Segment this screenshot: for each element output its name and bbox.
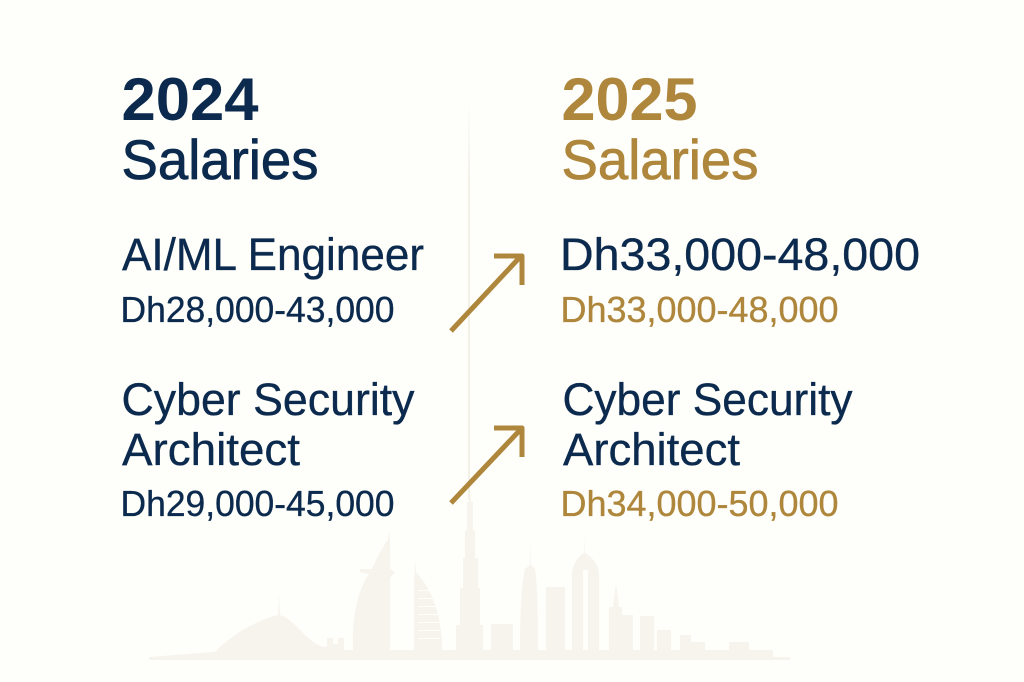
heading: Salaries: Salaries	[562, 128, 758, 191]
role: Cyber Security Architect	[122, 374, 415, 475]
salary: AI/ML Engineer 2024: Dh28,000-43,000	[120, 289, 394, 330]
role: Cyber Security Architect: Architect	[563, 424, 740, 475]
skyline silhouette	[149, 490, 790, 660]
salary headline: Dh33,000-48,000: Dh33,000-48,000	[560, 229, 920, 280]
heading: Salaries: Salaries	[122, 128, 318, 191]
heading: 2024: 2024	[122, 66, 259, 133]
salary: Cyber Security Architect 2024: Dh29,000-45,000	[120, 483, 394, 524]
role: Cyber Security Architect: Cyber Security	[122, 374, 415, 425]
heading: 2025: 2025	[562, 66, 698, 133]
panel: 2025 salaries	[560, 66, 920, 524]
role: Cyber Security Architect: Cyber Security	[562, 374, 853, 425]
role: AI/ML Engineer: AI/ML Engineer	[122, 229, 424, 280]
role: Cyber Security Architect: Architect	[122, 424, 300, 475]
panel: 2024 salaries	[120, 66, 424, 524]
salary: AI/ML Engineer 2025: Dh33,000-48,000	[560, 289, 838, 330]
arrow: Cyber Security Architect increase	[451, 428, 522, 503]
salary: Cyber Security Architect 2025: Dh34,000-50,000	[560, 483, 838, 524]
role: Cyber Security Architect	[562, 374, 853, 475]
arrow: AI/ML Engineer increase	[451, 256, 522, 331]
